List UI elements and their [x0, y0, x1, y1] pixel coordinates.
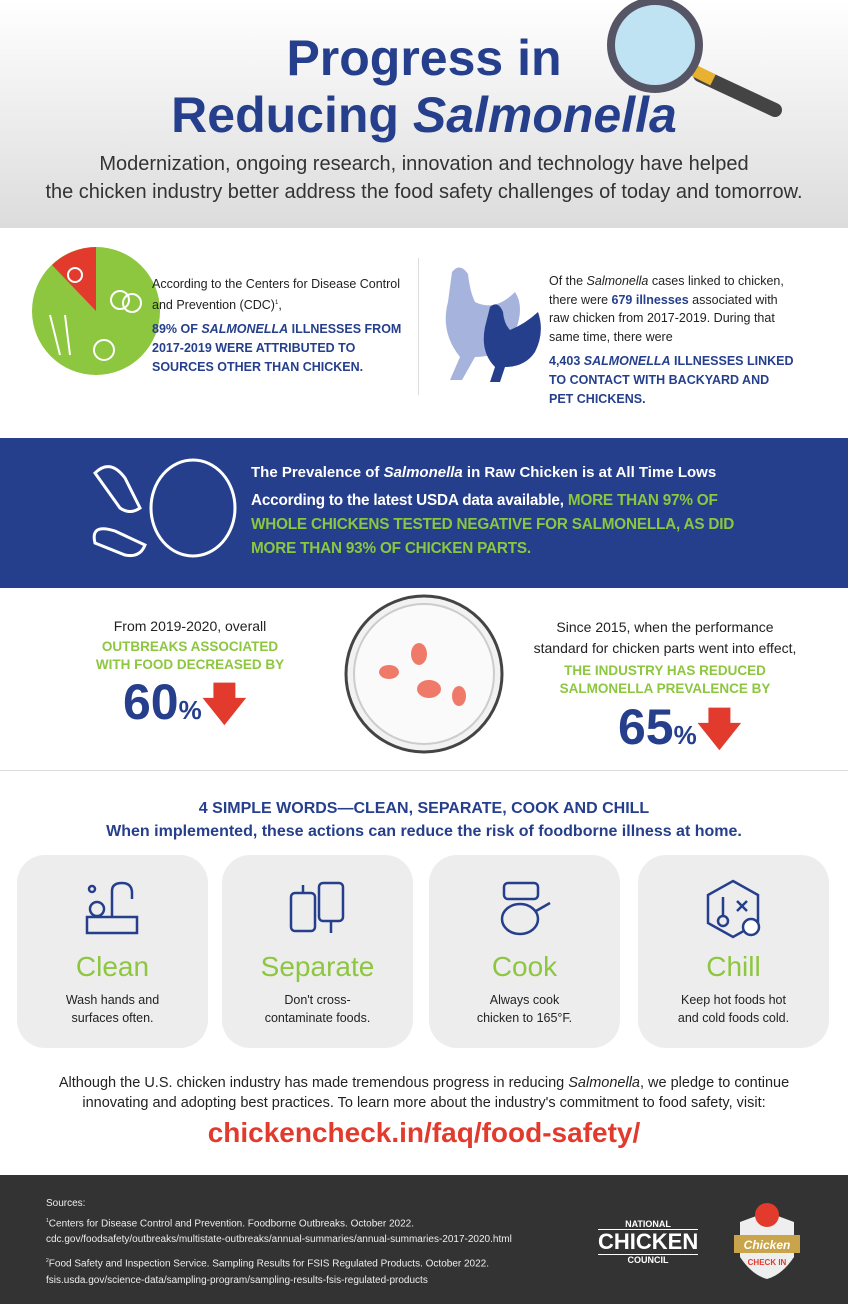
text: According to the latest USDA data available, MORE THAN 97% OF WHOLE CHICKENS TESTED NEGATIVE FOR SALMONELLA, AS DID MORE THAN 93% OF CHICKEN PARTS. — [251, 492, 734, 557]
icon: thermometer chicken — [500, 882, 551, 936]
card: cook: chicken to 165°F. — [477, 1011, 572, 1025]
closing text: Although the U.S. chicken industry has made tremendous progress in reducing Salmonella, we pledge to continue — [59, 1075, 789, 1091]
logo: Chicken Check In — [734, 1203, 800, 1279]
sources: 2Food Safety and Inspection Service. Sampling Results for FSIS Regulated Products. October 2022. — [46, 1258, 489, 1269]
logo: Chicken Check In: CHECK IN — [748, 1258, 787, 1267]
text: 4,403 SALMONELLA ILLNESSES LINKED TO CONTACT WITH BACKYARD AND PET CHICKENS. — [549, 354, 794, 406]
card: separate — [222, 855, 413, 1048]
card: clean: Clean — [76, 951, 149, 982]
icon: raw chicken — [92, 458, 236, 558]
card: cook: Always cook — [490, 993, 559, 1007]
card: cook: Cook — [492, 951, 557, 982]
card: separate: contaminate foods. — [265, 1011, 370, 1025]
footer — [0, 1175, 848, 1304]
stat: 60%: WITH FOOD DECREASED BY — [96, 657, 284, 672]
icon: cutting boards — [290, 882, 344, 933]
text: According to the Centers for Disease Control and Prevention (CDC)1, — [152, 277, 400, 312]
text: Of the Salmonella cases linked to chicken, there were 679 illnesses associated with raw chicken from 2017-2019. During that same time, there were — [549, 274, 784, 344]
card: clean — [17, 855, 208, 1048]
closing text — [58, 1075, 789, 1111]
text: 89% OF SALMONELLA ILLNESSES FROM 2017-2019 WERE ATTRIBUTED TO SOURCES OTHER THAN CHICKEN. — [152, 322, 401, 374]
subtitle: Modernization, ongoing research, innovation and technology have helped — [99, 153, 749, 175]
title — [171, 30, 677, 143]
icon: chickens — [446, 268, 541, 382]
stat: 60% — [96, 618, 284, 730]
header — [0, 0, 848, 228]
panel: CDC stat — [32, 247, 401, 375]
icon: petri dish with bacteria — [344, 594, 504, 754]
stat: 65%: 65%🡇 — [618, 699, 742, 755]
card: separate: Separate — [261, 951, 374, 982]
sources: cdc.gov/foodsafety/outbreaks/multistate-outbreaks/annual-summaries/annual-summaries-2017-2020.html — [46, 1234, 512, 1245]
subtitle: the chicken industry better address the food safety challenges of today and tomorrow. — [45, 181, 803, 203]
card: separate: Don't cross- — [284, 993, 351, 1007]
stat: 65%: SALMONELLA PREVALENCE BY — [560, 681, 770, 696]
icon: sink — [86, 882, 138, 934]
logo: Chicken Check In: Chicken — [744, 1238, 790, 1252]
subtitle — [45, 153, 803, 203]
card: chill: Keep hot foods hot — [681, 993, 786, 1007]
logo: National Chicken Council: COUNCIL — [628, 1255, 668, 1265]
icon: magnifying glass — [607, 0, 782, 117]
card: chill — [638, 855, 829, 1048]
card: chill: Chill — [706, 951, 761, 982]
logo: National Chicken Council — [598, 1219, 698, 1265]
card: clean: surfaces often. — [72, 1011, 154, 1025]
stat: 65%: Since 2015, when the performance standard for chicken parts went into effect, — [534, 619, 796, 656]
logo: National Chicken Council: NATIONAL — [625, 1219, 671, 1229]
card: cook — [429, 855, 620, 1048]
heading: 4 simple words: When implemented, these actions can reduce the risk of foodborne illness at home. — [106, 823, 742, 840]
heading: The Prevalence of Salmonella in Raw Chicken is at All Time Lows — [251, 464, 716, 481]
sources: fsis.usda.gov/science-data/sampling-program/sampling-results-fsis-regulated-products — [46, 1275, 428, 1286]
stat: 60%: From 2019-2020, overall — [114, 618, 266, 634]
panel: blue band — [0, 438, 848, 588]
icon: thermometer snowflake — [706, 880, 760, 938]
logo: National Chicken Council: CHICKEN — [598, 1229, 698, 1254]
stat: 60%: 60%🡇 — [123, 674, 247, 730]
icon: pie chart — [32, 247, 160, 375]
sources: Sources: — [46, 1198, 85, 1209]
link: chickencheck.in/faq/food-safety/ — [208, 1117, 640, 1148]
title: Progress in — [286, 30, 562, 86]
closing text: innovating and adopting best practices. To learn more about the industry's commitment to food safety, visit: — [82, 1095, 766, 1111]
stat: 65% — [534, 619, 796, 755]
stat: 65%: THE INDUSTRY HAS REDUCED — [564, 663, 766, 678]
stat: 60%: OUTBREAKS ASSOCIATED — [102, 639, 278, 654]
heading: 4 simple words: 4 SIMPLE WORDS—CLEAN, SEPARATE, COOK AND CHILL — [199, 800, 649, 817]
panel: backyard chickens — [446, 268, 794, 406]
sources: 1Centers for Disease Control and Prevention. Foodborne Outbreaks. October 2022. — [46, 1218, 414, 1229]
card: clean: Wash hands and — [66, 993, 159, 1007]
sources — [46, 1198, 512, 1286]
card: chill: and cold foods cold. — [678, 1011, 789, 1025]
text — [549, 274, 794, 406]
title: Reducing Salmonella — [171, 87, 677, 143]
text — [152, 277, 401, 374]
heading: 4 simple words — [106, 800, 742, 840]
